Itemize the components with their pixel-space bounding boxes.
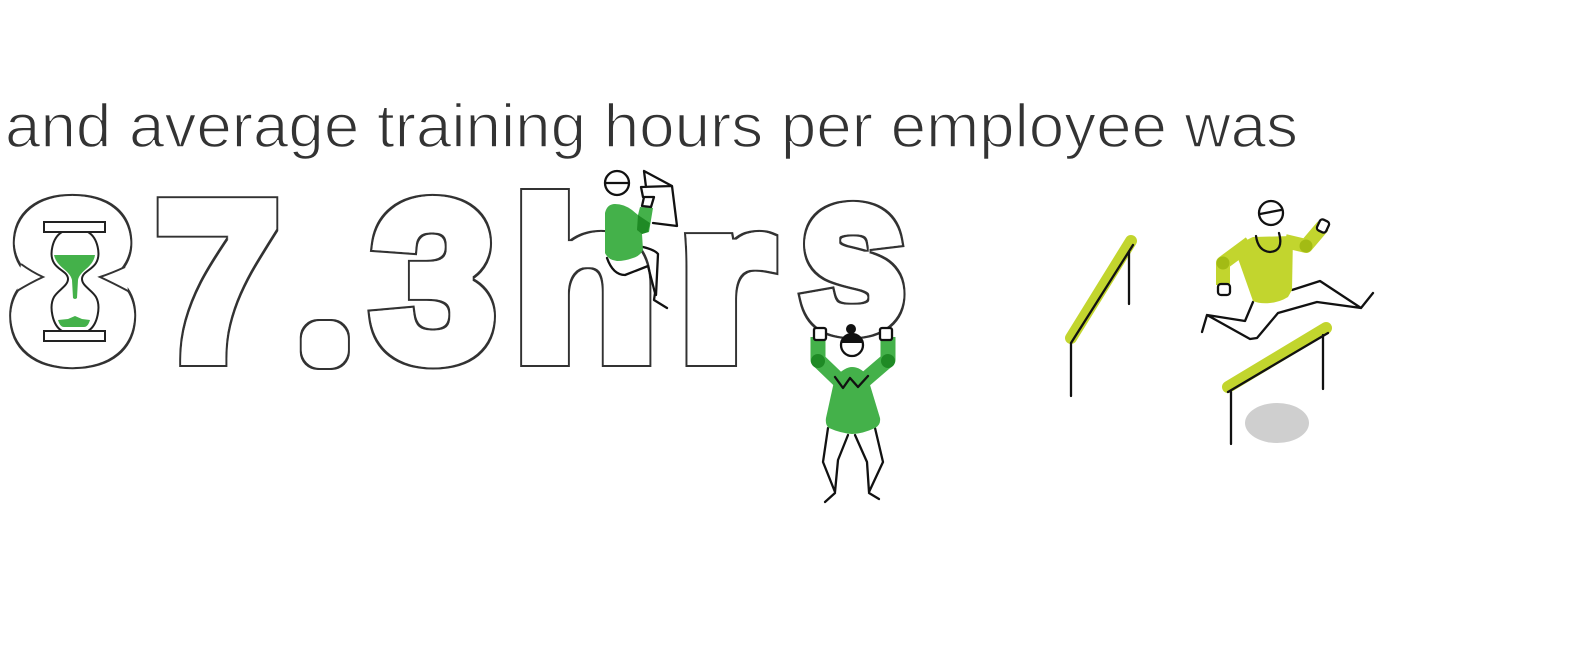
big number 87.3hrs: h: [512, 156, 658, 408]
icon: hourglass: [17, 222, 128, 341]
illustration: person lifting the letter s: [811, 324, 895, 502]
illustration: person sitting on the letter h reading: [605, 171, 677, 308]
big number 87.3hrs: 7: [155, 155, 280, 407]
big number 87.3hrs: 3: [371, 155, 496, 407]
big number 87.3hrs: s: [799, 126, 907, 377]
illustration: first hurdle: [1071, 241, 1133, 396]
big number 87.3hrs: r: [677, 156, 773, 408]
big number 87.3hrs: 8: [10, 155, 135, 407]
big number 87.3hrs: .: [311, 262, 339, 374]
illustration: second hurdle with shadow: [1228, 328, 1328, 444]
big number 87.3hrs: [10, 126, 907, 408]
heading text: and average training hours per employee was: [5, 92, 1298, 160]
illustration: runner jumping over hurdle: [1202, 201, 1373, 339]
